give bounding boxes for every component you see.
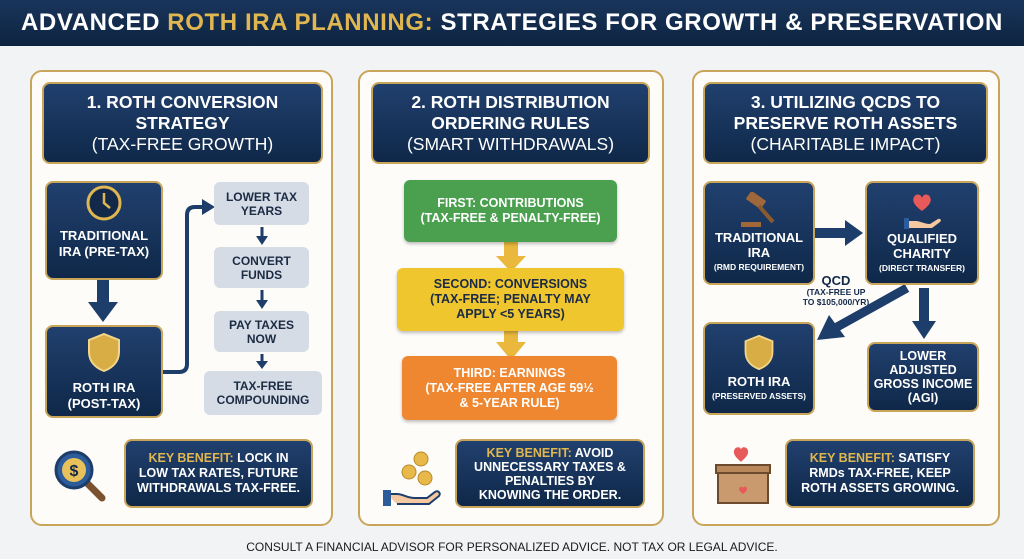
heading 3: PRESERVE ROTH ASSETS: [734, 112, 957, 132]
icon: shield: [744, 334, 774, 370]
title bar: [0, 0, 1024, 46]
box: lower agi: GROSS INCOME: [874, 377, 972, 391]
key benefit 3: [785, 439, 975, 508]
arrows: diagonal and down: [817, 285, 936, 340]
step: second conversions: APPLY <5 YEARS): [456, 307, 565, 321]
box: traditional ira: TRADITIONAL: [60, 228, 148, 243]
step: second conversions: (TAX-FREE; PENALTY MAY: [430, 292, 591, 306]
box: lower agi: LOWER: [900, 349, 946, 363]
box: traditional ira rmd: IRA: [748, 244, 770, 260]
heading 1: [42, 82, 323, 164]
box: roth ira: ROTH IRA: [73, 380, 135, 394]
key benefit 1: WITHDRAWALS TAX-FREE.: [137, 481, 300, 495]
heading 2: ORDERING RULES: [431, 112, 590, 132]
icon: clock: [86, 186, 122, 220]
box: roth ira preserved: [703, 322, 815, 415]
box: traditional ira: IRA (PRE-TAX): [59, 244, 149, 259]
icon: heart hand: [904, 194, 941, 229]
key benefit 1: [124, 439, 313, 508]
box: lower agi: ADJUSTED: [889, 363, 957, 377]
key benefit 1: LOW TAX RATES, FUTURE: [139, 466, 298, 480]
step: third earnings: (TAX-FREE AFTER AGE 59½: [425, 380, 594, 394]
heading 3: [703, 82, 988, 164]
step: pay taxes now: [214, 311, 309, 352]
box: traditional ira: [45, 181, 163, 280]
step: second conversions: SECOND: CONVERSIONS: [434, 277, 587, 291]
panel: distribution ordering: [358, 70, 664, 526]
key benefit 1: KEY BENEFIT: LOCK IN: [148, 451, 289, 465]
icon: magnifier dollar: [54, 450, 106, 502]
label: qcd: QCD: [822, 273, 850, 288]
heading 1: 1. ROTH CONVERSION: [87, 92, 278, 112]
label: qcd: [802, 273, 869, 307]
step: lower tax years: LOWER TAX: [226, 190, 297, 204]
box: lower agi: [867, 342, 979, 412]
step: pay taxes now: NOW: [247, 332, 276, 346]
icon: coins in hand: [383, 452, 441, 506]
step: lower tax years: [214, 182, 309, 225]
step: convert funds: CONVERT: [232, 254, 291, 268]
step: first contributions: [404, 180, 617, 242]
step: first contributions: FIRST: CONTRIBUTIONS: [437, 196, 584, 210]
footer disclaimer: CONSULT A FINANCIAL ADVISOR FOR PERSONALIZED ADVICE. NOT TAX OR LEGAL ADVICE.: [246, 540, 778, 554]
box: roth ira preserved: ROTH IRA: [728, 374, 790, 388]
step: third earnings: THIRD: EARNINGS: [454, 366, 565, 380]
key benefit 3: RMDs TAX-FREE, KEEP: [809, 466, 951, 480]
step: lower tax years: YEARS: [241, 204, 282, 218]
box: traditional ira rmd: (RMD REQUIREMENT): [714, 262, 804, 272]
step: tax-free compounding: COMPOUNDING: [217, 393, 309, 407]
key benefit 2: KEY BENEFIT: AVOID: [487, 446, 613, 460]
box: roth ira: [45, 325, 163, 418]
box: qualified charity: [865, 181, 979, 285]
panel: roth conversion: [30, 70, 333, 526]
heading 3: (CHARITABLE IMPACT): [751, 134, 940, 154]
key benefit 3: KEY BENEFIT: SATISFY: [810, 451, 950, 465]
step: convert funds: FUNDS: [241, 268, 282, 282]
box: qualified charity: CHARITY: [893, 246, 951, 260]
box: traditional ira rmd: [703, 181, 815, 285]
steps list: [204, 182, 322, 415]
step: second conversions: [397, 268, 624, 331]
step: tax-free compounding: TAX-FREE: [233, 379, 293, 393]
icon: shield: [88, 332, 120, 372]
key benefit 2: UNNECESSARY TAXES &: [474, 460, 626, 474]
step: first contributions: (TAX-FREE & PENALTY-FREE): [420, 211, 601, 225]
heading 2: (SMART WITHDRAWALS): [407, 134, 614, 154]
icon: gavel: [741, 192, 774, 227]
heading 2: 2. ROTH DISTRIBUTION: [411, 92, 610, 112]
label: qcd: (TAX-FREE UP: [807, 287, 865, 297]
box: lower agi: (AGI): [908, 391, 938, 405]
box: traditional ira rmd: TRADITIONAL: [715, 230, 803, 244]
arrow: down: [88, 280, 118, 322]
box: roth ira: (POST-TAX): [68, 396, 140, 410]
box: qualified charity: (DIRECT TRANSFER): [879, 262, 965, 272]
heading 1: (TAX-FREE GROWTH): [92, 134, 273, 154]
arrows: gold down: [496, 242, 526, 356]
box: qualified charity: QUALIFIED: [887, 230, 957, 246]
heading 2: [371, 82, 650, 164]
step: tax-free compounding: [204, 371, 322, 415]
icon: donation box: [715, 447, 771, 504]
step: pay taxes now: PAY TAXES: [229, 318, 294, 332]
step: third earnings: & 5-YEAR RULE): [459, 396, 560, 410]
arrow: connector: [163, 199, 214, 374]
key benefit 2: [455, 439, 645, 508]
step: convert funds: [214, 247, 309, 288]
key benefit 2: KNOWING THE ORDER.: [479, 488, 621, 502]
box: roth ira preserved: (PRESERVED ASSETS): [712, 390, 806, 400]
key benefit 2: PENALTIES BY: [505, 474, 595, 488]
heading 3: 3. UTILIZING QCDS TO: [751, 92, 940, 112]
arrow: right: [815, 220, 863, 246]
heading 1: STRATEGY: [136, 112, 230, 132]
step: third earnings: [402, 356, 617, 420]
icon: magnifier dollar: $: [70, 463, 79, 480]
key benefit 3: ROTH ASSETS GROWING.: [801, 481, 959, 495]
label: qcd: TO $105,000/YR): [803, 297, 869, 307]
title bar: ADVANCED ROTH IRA PLANNING: STRATEGIES FOR GROWTH & PRESERVATION: [21, 9, 1003, 36]
panel: qcds: [692, 70, 1000, 526]
